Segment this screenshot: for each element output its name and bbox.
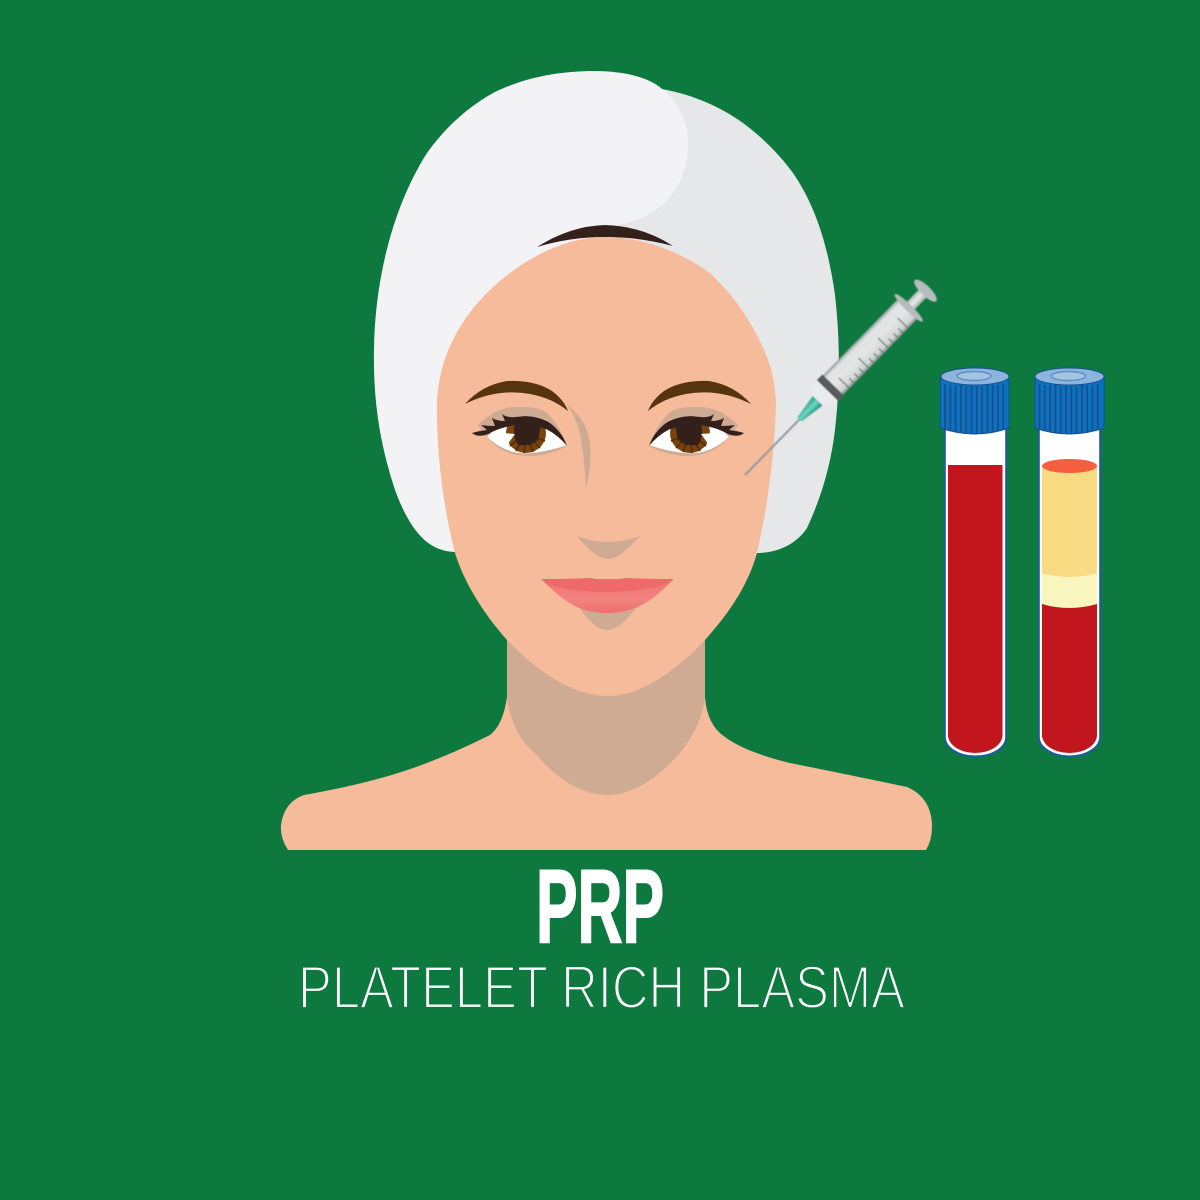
right eye (649, 407, 744, 456)
subtitle: Platelet Rich Plasma: PLATELET RICH PLASMA (298, 954, 905, 1021)
blood tube: whole blood (940, 368, 1009, 756)
upper lip (541, 578, 674, 592)
title: PRP: PRP (536, 849, 664, 965)
plasma surface (1042, 459, 1097, 473)
flange (892, 292, 925, 324)
towel: shaded back part (600, 89, 839, 553)
left eyebrow (465, 381, 568, 411)
body and shoulders (281, 630, 932, 850)
tube body (945, 420, 1006, 756)
blood (948, 465, 1002, 753)
neck shadow (507, 635, 705, 795)
needle hub (795, 394, 824, 424)
needle (744, 417, 802, 476)
plasma layer (1042, 466, 1097, 577)
left eye (472, 407, 567, 456)
barrel (820, 299, 918, 398)
face (437, 237, 776, 696)
nose shadow: bridge (567, 405, 590, 488)
tube body (1039, 420, 1100, 756)
cap (1035, 368, 1104, 434)
plunger rod (904, 288, 929, 312)
blood tube: separated plasma (1035, 368, 1104, 756)
towel: light front part (374, 71, 688, 560)
cap (940, 368, 1009, 434)
collar (808, 379, 839, 410)
lips (541, 578, 674, 613)
right eyebrow (648, 381, 751, 411)
buffy coat layer (1042, 572, 1097, 608)
hairline (537, 225, 673, 247)
scale marks (839, 318, 908, 388)
syringe (731, 273, 943, 489)
lower lip (541, 579, 674, 613)
nose shadow: under nose (577, 536, 640, 559)
dark ring (817, 374, 844, 401)
illustration: woman's head with towel (281, 71, 932, 850)
plunger knob (911, 277, 940, 305)
chin shadow (580, 608, 636, 630)
red cell layer (1042, 600, 1097, 753)
